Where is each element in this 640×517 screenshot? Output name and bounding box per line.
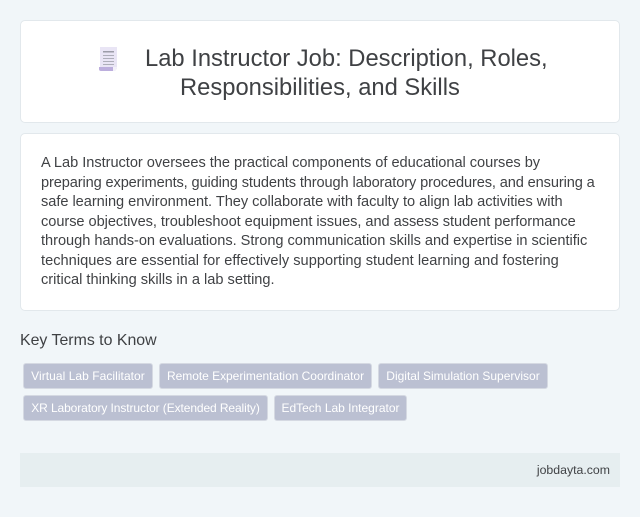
description text: preparing experiments, guiding students through laboratory procedures, and ensuring a: [41, 175, 595, 191]
tag: Virtual Lab Facilitator: [31, 369, 145, 383]
description text: course objectives, troubleshoot equipment issues, and assess student performance: [41, 214, 576, 230]
footer bar: [20, 453, 620, 487]
tag: [378, 363, 548, 389]
footer text: jobdayta.com: [537, 463, 610, 477]
tag: [274, 395, 407, 421]
tag: Remote Experimentation Coordinator: [167, 369, 364, 383]
tag: XR Laboratory Instructor (Extended Reality): [31, 401, 260, 415]
section heading: key terms: Key Terms to Know: [20, 332, 157, 349]
description text: [41, 155, 595, 288]
tag: EdTech Lab Integrator: [281, 401, 400, 415]
description card: [20, 133, 620, 311]
tag: [23, 395, 268, 421]
description text: critical thinking skills in a lab setting.: [41, 272, 275, 288]
key term tags: [23, 363, 548, 421]
description text: A Lab Instructor oversees the practical components of educational courses by: [41, 155, 540, 171]
tag: [23, 363, 153, 389]
heading: Responsibilities, and Skills: [180, 74, 460, 101]
tag: [159, 363, 372, 389]
heading: [145, 45, 548, 101]
description text: techniques are essential for effectively supporting student learning and fostering: [41, 253, 559, 269]
description text: through hands-on evaluations. Strong communication skills and expertise in scientific: [41, 233, 587, 249]
heading: Lab Instructor Job: Description, Roles,: [145, 45, 548, 72]
description text: safe learning environment. They collaborate with faculty to align lab activities with: [41, 194, 563, 210]
title card: [20, 20, 620, 123]
tag: Digital Simulation Supervisor: [386, 369, 540, 383]
icon: document: [99, 47, 117, 71]
